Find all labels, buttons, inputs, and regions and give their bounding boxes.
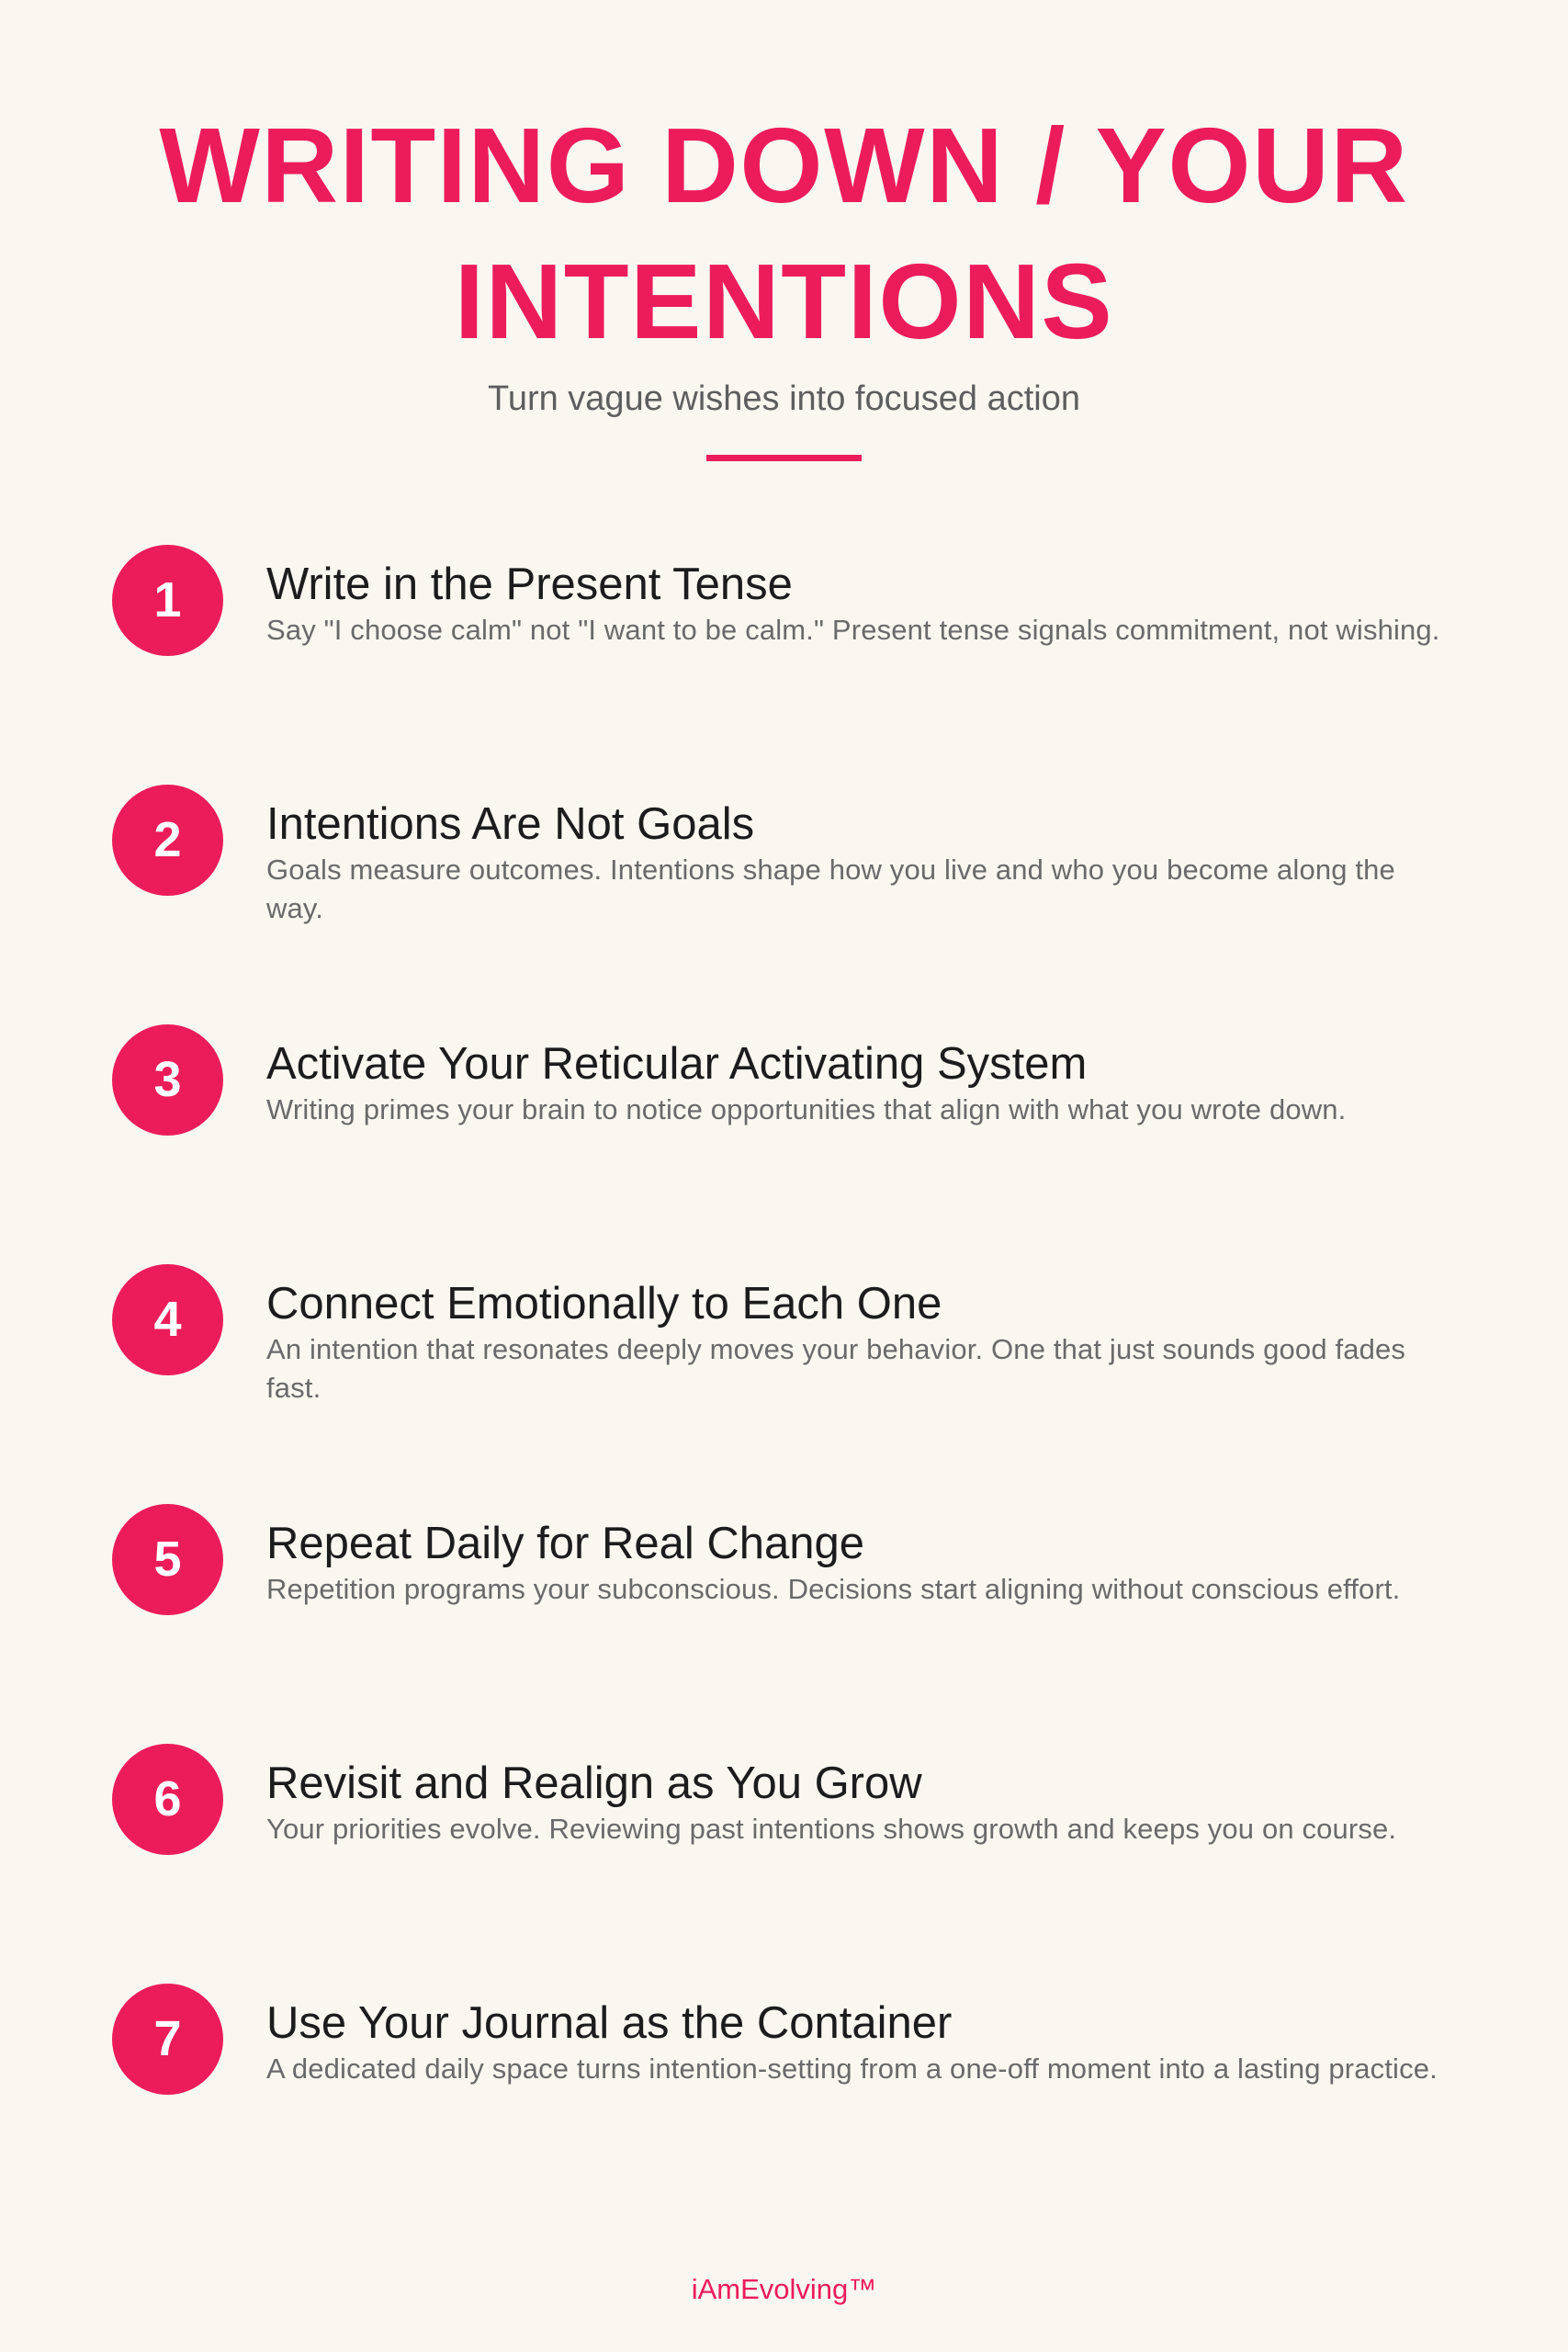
icon: number 1 bbox=[112, 545, 223, 656]
icon: number 4: 4 bbox=[153, 1292, 182, 1347]
text 2: Goals measure outcomes. Intentions shape how you live and who you become along the bbox=[266, 854, 1395, 886]
item 3 bbox=[112, 1024, 1346, 1136]
heading 6: Revisit and Realign as You Grow bbox=[266, 1758, 922, 1808]
item 2 bbox=[112, 785, 1395, 924]
item 5 bbox=[112, 1504, 1400, 1615]
title: INTENTIONS bbox=[455, 242, 1113, 361]
item 7 bbox=[112, 1984, 1438, 2095]
icon: number 5 bbox=[112, 1504, 223, 1615]
heading 2: Intentions Are Not Goals bbox=[266, 799, 754, 849]
text 2: way. bbox=[266, 892, 323, 924]
icon: number 7: 7 bbox=[153, 2011, 182, 2066]
text 4 bbox=[266, 1333, 1405, 1404]
heading 4: Connect Emotionally to Each One bbox=[266, 1279, 942, 1329]
icon: number 6 bbox=[112, 1744, 223, 1855]
icon: number 4 bbox=[112, 1264, 223, 1375]
icon: number 2: 2 bbox=[153, 812, 182, 867]
item 1 bbox=[112, 545, 1440, 656]
text 2 bbox=[266, 854, 1395, 924]
icon: number 2 bbox=[112, 785, 223, 896]
text 4: An intention that resonates deeply moves your behavior. One that just sounds good fades bbox=[266, 1333, 1405, 1365]
footer brand: iAmEvolving™ bbox=[692, 2273, 876, 2305]
heading 3: Activate Your Reticular Activating System bbox=[266, 1039, 1087, 1089]
text 3: Writing primes your brain to notice opportunities that align with what you wrote down. bbox=[266, 1093, 1346, 1125]
text 4: fast. bbox=[266, 1372, 321, 1404]
heading 7: Use Your Journal as the Container bbox=[266, 1998, 952, 2048]
icon: number 1: 1 bbox=[153, 572, 182, 628]
icon: number 3: 3 bbox=[153, 1052, 182, 1107]
text 1: Say "I choose calm" not "I want to be calm." Present tense signals commitment, not wishing. bbox=[266, 614, 1440, 646]
icon: number 6: 6 bbox=[153, 1771, 182, 1826]
heading 5: Repeat Daily for Real Change bbox=[266, 1519, 864, 1568]
heading 1: Write in the Present Tense bbox=[266, 560, 793, 609]
text 5: Repetition programs your subconscious. Decisions start aligning without conscious effort. bbox=[266, 1573, 1400, 1605]
icon: number 5: 5 bbox=[153, 1532, 182, 1587]
text 6: Your priorities evolve. Reviewing past intentions shows growth and keeps you on course. bbox=[266, 1813, 1396, 1845]
subtitle: Turn vague wishes into focused action bbox=[488, 379, 1080, 418]
title: WRITING DOWN / YOUR bbox=[159, 106, 1409, 225]
item 6 bbox=[112, 1744, 1396, 1855]
title bbox=[159, 106, 1409, 361]
item 4 bbox=[112, 1264, 1405, 1404]
text 7: A dedicated daily space turns intention-setting from a one-off moment into a lasting practice. bbox=[266, 2052, 1438, 2085]
icon: number 7 bbox=[112, 1984, 223, 2095]
icon: number 3 bbox=[112, 1024, 223, 1136]
